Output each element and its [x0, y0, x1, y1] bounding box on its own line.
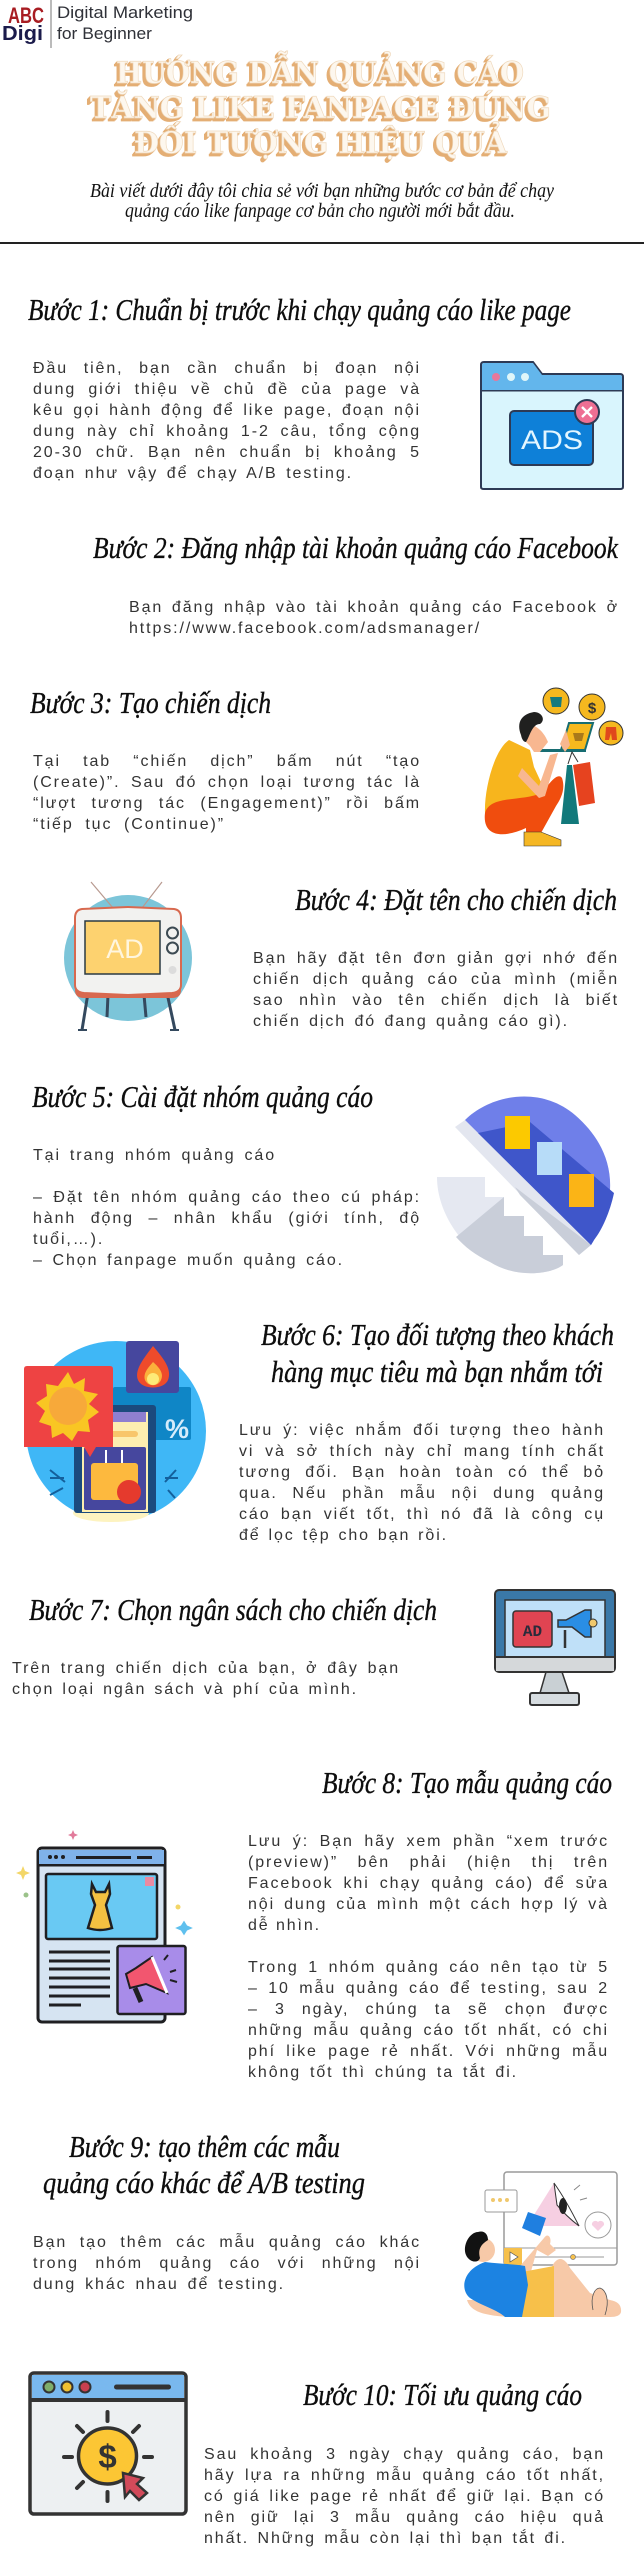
subtitle: Bài viết dưới đây tôi chia sẻ với bạn những bước cơ bản để chạy — [90, 180, 554, 202]
text block: step 6: qua. Nếu phần mẫu nội dung quảng — [239, 1485, 605, 1502]
icon: ADS browser folder: ADS — [521, 425, 583, 455]
text block: step 10: hãy lựa ra những mẫu quảng cáo tốt nhất, — [204, 2467, 605, 2484]
text block: step 2: Bạn đăng nhập vào tài khoản quảng cáo Facebook ở — [129, 599, 619, 616]
text block: step 8: – 3 ngày, chúng ta sẽ chọn được — [248, 2001, 609, 2018]
icon: shopper with laptop — [485, 688, 623, 846]
logo — [2, 0, 193, 48]
text block: step 8: – 10 mẫu quảng cáo để testing, sau 2 — [248, 1980, 609, 1997]
text block: step 1: Đầu tiên, bạn cần chuẩn bị đoạn nội — [33, 360, 421, 377]
text block: step 5: hành động – nhân khẩu (giới tính, độ — [33, 1210, 421, 1227]
text block: step 8: (preview)” bên phải (hiện thị trên — [248, 1854, 609, 1871]
text block: step 9: Bạn tạo thêm các mẫu quảng cáo khác — [33, 2234, 421, 2251]
text block: step 1: 20-30 chữ. Bạn nên chuẩn bị khoảng 5 — [33, 444, 421, 461]
heading: step 10: Bước 10: Tối ưu quảng cáo — [303, 2377, 582, 2412]
logo: for Beginner — [57, 24, 152, 43]
text block: step 10: Sau khoảng 3 ngày chạy quảng cáo, bạn — [204, 2446, 605, 2463]
icon: person with video ad frame — [464, 2172, 621, 2317]
icon: browser window with coin: $ — [98, 2438, 117, 2475]
text block: step 1: kêu gọi hành động để like page, đoạn nội — [33, 402, 421, 419]
text block: step 5: Tại trang nhóm quảng cáo — [33, 1147, 276, 1164]
text block: step 8: Facebook khi chạy quảng cáo) để sửa — [248, 1875, 609, 1892]
text block: step 5: – Chọn fanpage muốn quảng cáo. — [33, 1252, 344, 1269]
text block: step 3: “lượt tương tác (Engagement)” rồi bấm — [33, 795, 421, 812]
heading: step 9: quảng cáo khác để A/B testing — [43, 2165, 365, 2200]
text block: step 10: có giá like page rẻ nhất để giữ lại. Bạn có — [204, 2488, 605, 2505]
text block: step 3: (Create)”. Sau đó chọn loại tương tác là — [33, 774, 421, 791]
icon: ad document with dress and megaphone — [16, 1830, 191, 2022]
text block: step 4: chiến dịch đó đang quảng cáo gì). — [253, 1013, 569, 1030]
text block: step 7: chọn loại ngân sách và phí của mình. — [12, 1681, 358, 1698]
text block: step 6: tương đối. Bạn hoàn toàn có thể bỏ — [239, 1464, 605, 1481]
heading: step 3: Bước 3: Tạo chiến dịch — [30, 685, 271, 720]
text block: step 8: Trong 1 nhóm quảng cáo nên tạo từ 5 — [248, 1959, 609, 1976]
text block: step 1: dung này chỉ khoảng 1-2 câu, tổng cộng — [33, 423, 421, 440]
title — [90, 50, 551, 161]
icon: shopper with laptop: $ — [588, 700, 597, 717]
heading: step 6 — [261, 1317, 614, 1389]
text block: step 8: nội dung của mình một cách hợp lý và — [248, 1896, 609, 1913]
title: ĐỐI TƯỢNG HIỆU QUẢ — [134, 121, 508, 161]
text block: step 10: nhất. Những mẫu còn lại thì bạn tắt đi. — [204, 2530, 567, 2547]
text block: step 2 — [129, 599, 619, 637]
icon: browser window with coin — [30, 2373, 186, 2514]
text block: step 8: những mẫu quảng cáo tốt nhất, có chi — [248, 2022, 609, 2039]
divider rule — [0, 242, 644, 244]
logo: ABC — [8, 3, 44, 28]
text block: step 3: “tiếp tục (Continue)” — [33, 816, 225, 833]
icon: retro TV — [64, 882, 192, 1030]
text block: step 5: tuổi,…). — [33, 1231, 104, 1248]
heading: step 5: Bước 5: Cài đặt nhóm quảng cáo — [32, 1079, 373, 1114]
icon: sale collage — [24, 1341, 206, 1522]
icon: staircase — [437, 1096, 614, 1273]
text block: step 8: Lưu ý: Bạn hãy xem phần “xem trước — [248, 1833, 609, 1850]
heading: step 9 — [43, 2129, 365, 2200]
text block: step 5 — [33, 1147, 421, 1269]
text block: step 4: chiến dịch quảng cáo của mình (miễn — [253, 971, 619, 988]
subtitle: quảng cáo like fanpage cơ bản cho người mới bắt đầu. — [125, 200, 515, 222]
text block: step 6: vi và sở thích này chỉ mang tính chất — [239, 1443, 605, 1460]
title: HƯỚNG DẪN QUẢNG CÁO — [116, 50, 524, 91]
icon: retro TV: AD — [106, 934, 144, 964]
text block: step 6: cáo bạn viết tốt, thì nó đã là công cụ — [239, 1506, 605, 1523]
heading: step 7: Bước 7: Chọn ngân sách cho chiến dịch — [29, 1592, 437, 1627]
text block: step 5: – Đặt tên nhóm quảng cáo theo cú pháp: — [33, 1189, 421, 1206]
text block: step 10 — [204, 2446, 605, 2547]
text block: step 1: dung giới thiệu về chủ đề của page và — [33, 381, 421, 398]
text block: step 2: https://www.facebook.com/adsmanager/ — [129, 620, 481, 637]
text block: step 4: Bạn hãy đặt tên đơn giản gợi nhớ đến — [253, 950, 619, 967]
heading: step 9: Bước 9: tạo thêm các mẫu — [69, 2129, 340, 2164]
icon: monitor with AD and megaphone: AD — [523, 1623, 542, 1641]
text block: step 3 — [33, 753, 421, 833]
text block: step 7: Trên trang chiến dịch của bạn, ở đây bạn — [12, 1660, 400, 1677]
text block: step 4: sao nhìn vào tên chiến dịch là biết — [253, 992, 619, 1009]
text block: step 8: không tốt thì chúng ta tắt đi. — [248, 2064, 518, 2081]
text block: step 7 — [12, 1660, 400, 1698]
text block: step 8: phí like page rẻ nhất. Với những mẫu — [248, 2043, 609, 2060]
text block: step 8: dễ nhìn. — [248, 1917, 321, 1934]
icon: ADS browser folder — [481, 362, 623, 489]
text block: step 6 — [239, 1421, 605, 1544]
logo: Digital Marketing — [57, 3, 193, 22]
text block: step 1 — [33, 360, 421, 482]
logo: Digi — [2, 23, 43, 45]
text block: step 3: Tại tab “chiến dịch” bấm nút “tạo — [33, 753, 421, 770]
text block: step 9: dung khác nhau để testing. — [33, 2276, 285, 2293]
text block: step 9: trong nhóm quảng cáo với những nội — [33, 2255, 421, 2272]
text block: step 8 — [248, 1833, 609, 2081]
text block: step 6: Lưu ý: việc nhắm đối tượng theo hành — [239, 1422, 605, 1439]
icon: monitor with AD and megaphone — [495, 1590, 615, 1705]
text block: step 10: nên giữ lại 3 mẫu quảng cáo hiệu quả — [204, 2509, 605, 2526]
icon: sale collage: % — [165, 1414, 189, 1444]
text block: step 4 — [253, 950, 619, 1030]
title: TĂNG LIKE FANPAGE ĐÚNG — [90, 90, 551, 126]
text block: step 9 — [33, 2233, 421, 2293]
text block: step 6: để lọc tệp cho bạn rồi. — [239, 1527, 448, 1544]
subtitle — [90, 180, 554, 222]
text block: step 1: đoạn như vậy để chạy A/B testing. — [33, 465, 353, 482]
